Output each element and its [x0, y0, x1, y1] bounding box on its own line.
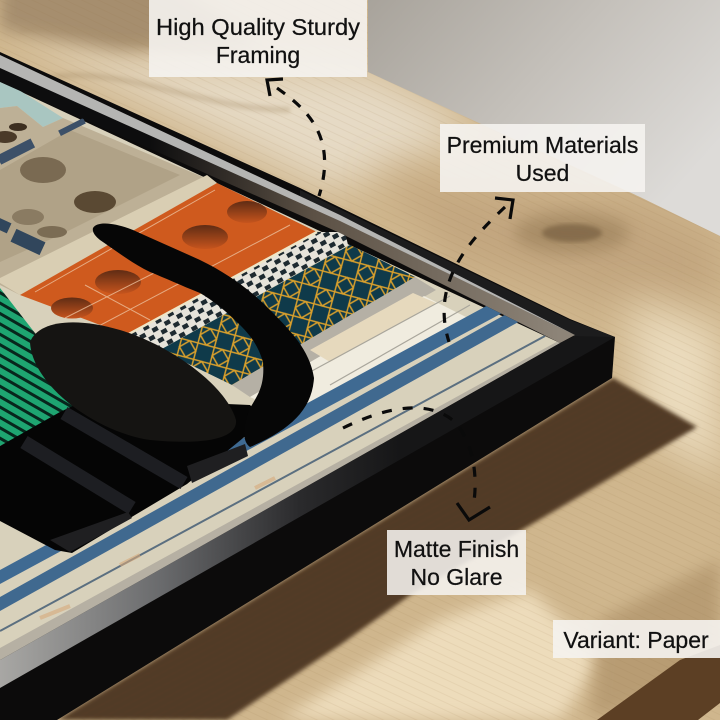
- cat: body: [0, 398, 265, 553]
- frame: silver edge: [0, 55, 575, 335]
- callout: Matte Finish No Glare: [387, 530, 526, 595]
- callout: Premium Materials Used: [440, 124, 645, 192]
- art: blue floor stripes: [0, 304, 560, 664]
- frame: inner wall: [0, 68, 575, 343]
- cat: rear leg stripes: [24, 413, 184, 508]
- cat: head oval: [30, 322, 236, 442]
- callout: Premium Materials Used: Used: [516, 160, 569, 186]
- callout: High Quality Sturdy Framing: Framing: [216, 42, 300, 68]
- dashed arrow: to High Quality Sturdy Framing: [267, 79, 325, 196]
- callout: High Quality Sturdy Framing: High Quality Sturdy: [156, 14, 361, 40]
- artwork print: [0, 78, 560, 664]
- art: green striped shape: [0, 288, 73, 446]
- wall background: [368, 0, 720, 236]
- art: teal and gold tile band: [160, 245, 415, 385]
- art: black cat figure: [0, 224, 314, 553]
- art: sky: [0, 78, 63, 127]
- dark table edge bottom right: [597, 645, 720, 720]
- frame cast shadow on table: [57, 378, 697, 720]
- cat: tail: [93, 224, 314, 447]
- art: building facade: [0, 106, 217, 295]
- callout: Variant Paper: Variant: Paper: [563, 627, 709, 653]
- art: orange floor flecks: [40, 478, 275, 618]
- art: orange band: [20, 183, 317, 335]
- frame: lower bevel: [0, 336, 615, 688]
- dashed arrow: to Premium Materials Used: [444, 198, 513, 342]
- cat: paws: [50, 444, 248, 552]
- callout: Premium Materials Used: Premium Materials: [447, 132, 638, 158]
- frame: top band: [300, 190, 615, 337]
- callout: Matte Finish No Glare: No Glare: [410, 564, 503, 590]
- black picture frame: [0, 52, 615, 720]
- callout: High Quality Sturdy Framing: [149, 0, 367, 77]
- dashed arrow: to Matte Finish No Glare: [343, 408, 490, 520]
- callout: Matte Finish No Glare: Matte Finish: [394, 536, 519, 562]
- art: checker band: [127, 232, 348, 350]
- art: grey and cream tile field: [232, 277, 470, 404]
- callout: Variant Paper: [553, 620, 720, 658]
- art: floor base: [0, 82, 560, 660]
